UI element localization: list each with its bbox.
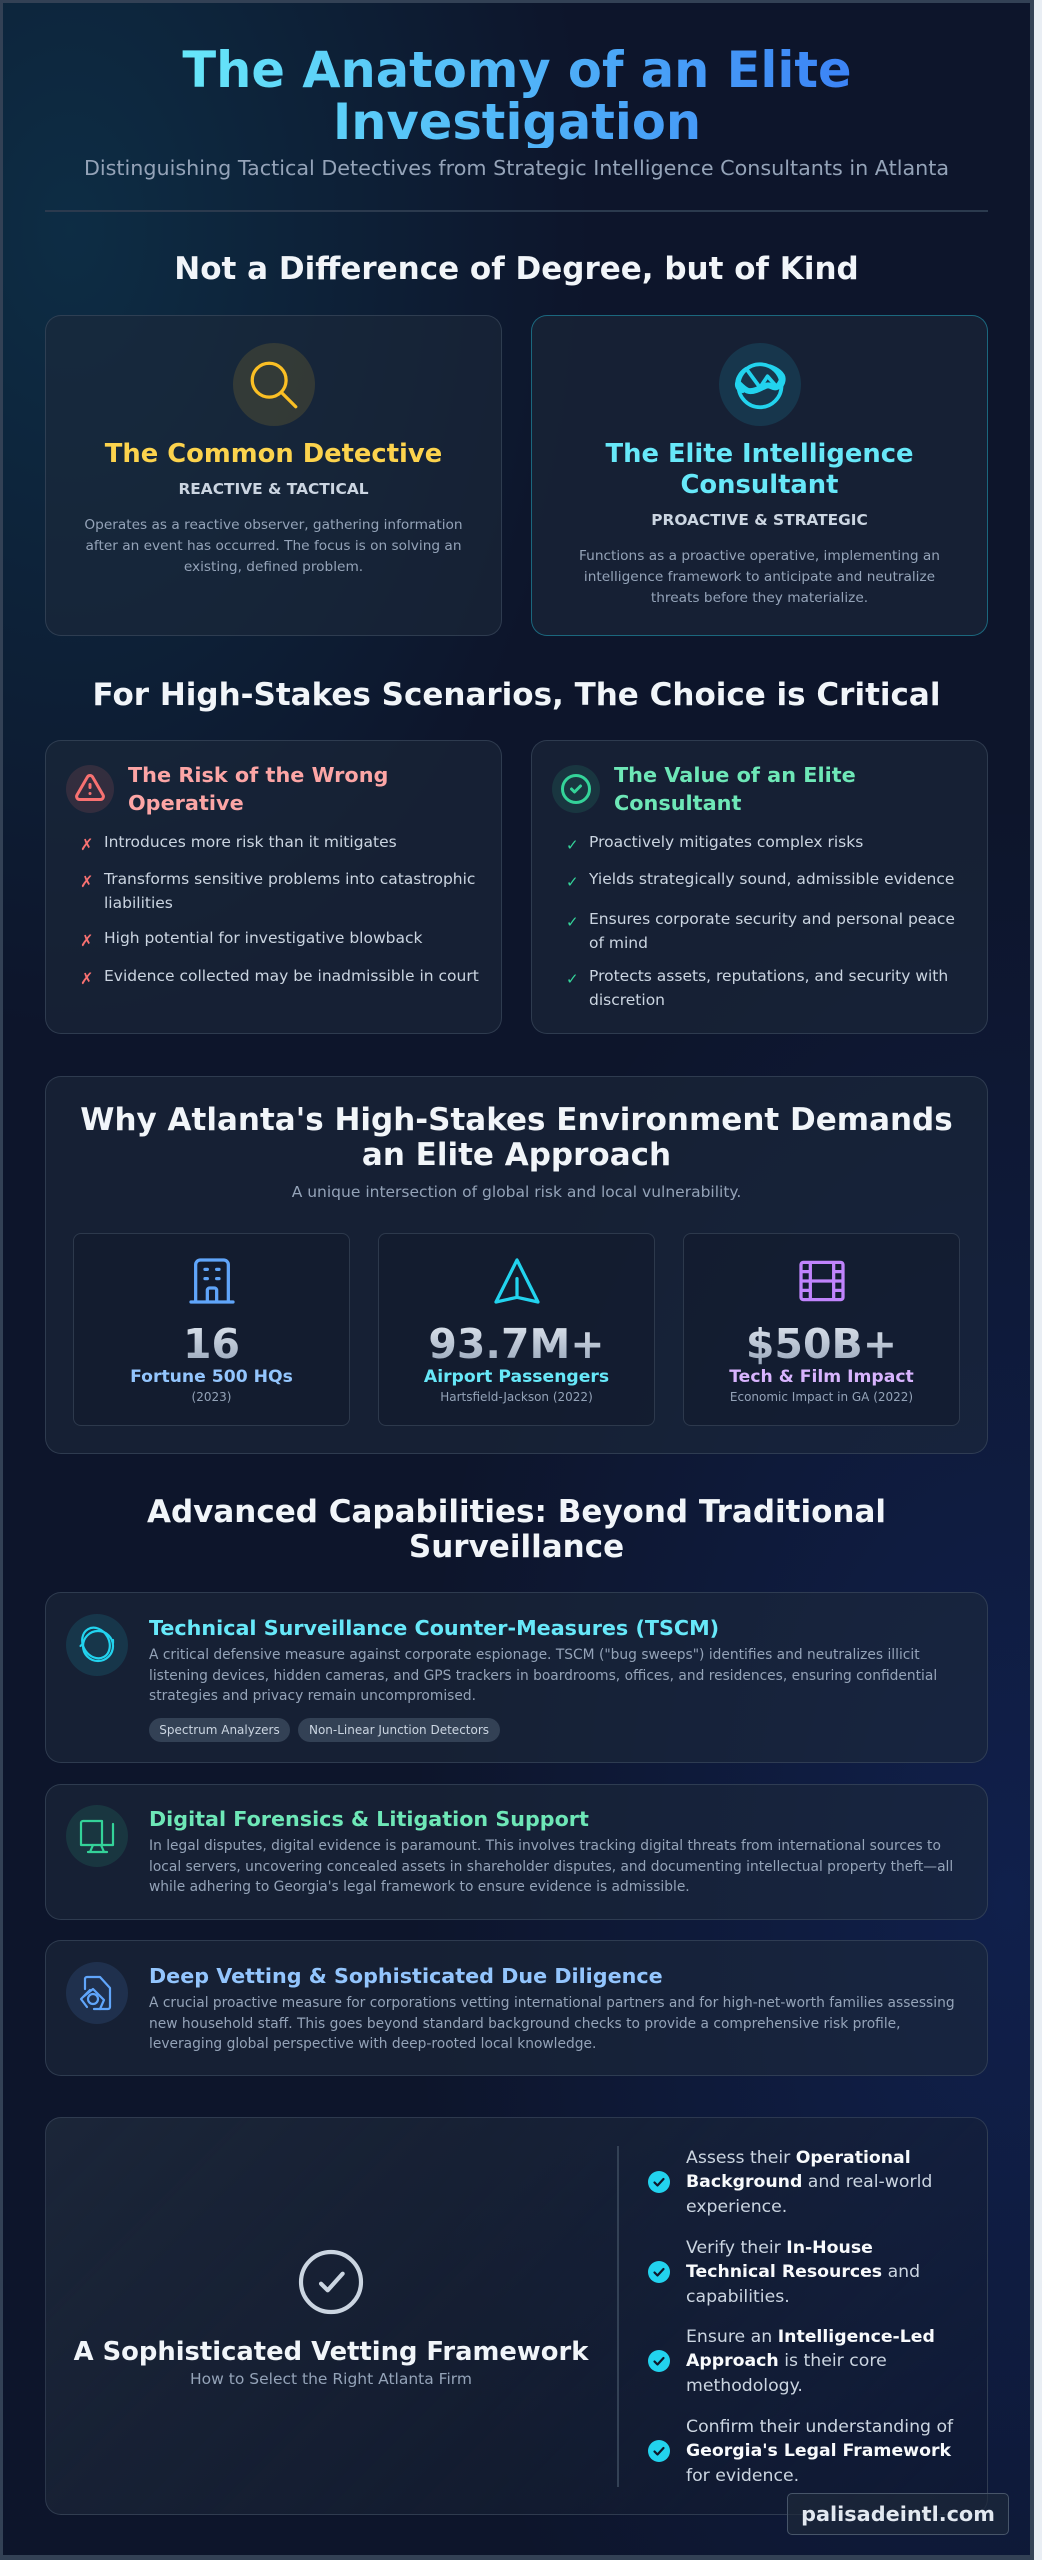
check: technical resources bbox=[648, 2261, 670, 2283]
risk title: The Risk of the Wrong bbox=[128, 763, 388, 787]
icon: office building bbox=[189, 1258, 235, 1304]
heading: difference of kind: Not a Difference of Degree, but of Kind bbox=[174, 251, 859, 287]
value list bbox=[566, 833, 955, 1009]
value title bbox=[614, 763, 856, 815]
note: 2023: (2023) bbox=[192, 1390, 231, 1404]
forensics title: Digital Forensics & Litigation Support bbox=[149, 1807, 589, 1831]
panel: deep vetting bbox=[45, 1940, 988, 2076]
Atlanta subtitle: A unique intersection of global risk and local vulnerability. bbox=[292, 1183, 741, 1201]
panel: TSCM bbox=[45, 1592, 988, 1763]
label: Airport Passengers: Airport Passengers bbox=[424, 1367, 609, 1387]
risk title: Operative bbox=[128, 791, 244, 815]
detective description: Operates as a reactive observer, gathering information bbox=[84, 517, 463, 533]
subtitle: Distinguishing Tactical Detectives from Strategic Intelligence Consultants in Atlanta bbox=[84, 156, 949, 180]
risk item 1: ✗ bbox=[80, 835, 93, 854]
icon: intelligence brain bbox=[719, 343, 801, 426]
framework title: A Sophisticated Vetting Framework bbox=[74, 2337, 588, 2367]
risk title bbox=[128, 763, 388, 815]
TSCM description bbox=[149, 1647, 937, 1704]
TSCM description: A critical defensive measure against corporate espionage. TSCM ("bug sweeps") identifies and neutralizes illicit bbox=[149, 1647, 920, 1663]
value title: Consultant bbox=[614, 791, 741, 815]
item: legal framework: Confirm their understanding of bbox=[686, 2417, 953, 2437]
check: intelligence-led bbox=[648, 2350, 670, 2372]
item: intelligence-led bbox=[686, 2327, 935, 2396]
risk item 2: Transforms sensitive problems into catastrophic bbox=[104, 870, 475, 888]
panel: risk of the wrong operative bbox=[45, 740, 502, 1034]
title: The Anatomy of an Elite bbox=[182, 41, 852, 99]
value: 93.7M+: 93.7M+ bbox=[428, 1320, 605, 1368]
icon: film strip bbox=[799, 1260, 845, 1302]
stat: airport passengers bbox=[378, 1233, 655, 1426]
value title: The Value of an Elite bbox=[614, 763, 856, 787]
title: Investigation bbox=[333, 93, 701, 151]
item: technical resources bbox=[686, 2238, 920, 2307]
note: Hartsfield-Jackson: Hartsfield-Jackson (2022) bbox=[440, 1390, 593, 1404]
consultant subtitle: PROACTIVE & STRATEGIC bbox=[651, 511, 868, 529]
detective description: existing, defined problem. bbox=[184, 559, 363, 575]
icon: TSCM orbit bbox=[66, 1614, 128, 1676]
item: operational background: Assess their Operational bbox=[686, 2148, 911, 2168]
detective title: The Common Detective bbox=[105, 439, 442, 469]
risk item 2: ✗ bbox=[80, 872, 93, 891]
stat: tech and film bbox=[683, 1233, 960, 1426]
TSCM description: listening devices, hidden cameras, and GPS trackers in boardrooms, offices, and residences, ensuring confidential bbox=[149, 1668, 937, 1684]
Atlanta heading: Why Atlanta's High-Stakes Environment Demands bbox=[80, 1102, 953, 1138]
vetting description: leveraging global perspective with deep-rooted local knowledge. bbox=[149, 2036, 596, 2052]
consultant description: intelligence framework to anticipate and neutralize bbox=[584, 569, 935, 585]
Atlanta heading bbox=[80, 1102, 953, 1173]
icon: large check circle bbox=[298, 2250, 364, 2314]
value item 4: Protects assets, reputations, and security with bbox=[589, 967, 948, 985]
item: technical resources: Technical Resources and bbox=[686, 2262, 920, 2282]
stat: Fortune 500 bbox=[73, 1233, 350, 1426]
TSCM description: strategies and privacy remain uncompromised. bbox=[149, 1688, 476, 1704]
tag: junction detectors: Non-Linear Junction Detectors bbox=[309, 1723, 489, 1737]
label: Fortune 500 HQs: Fortune 500 HQs bbox=[130, 1367, 293, 1387]
value item 1: Proactively mitigates complex risks bbox=[589, 833, 863, 851]
item: operational background bbox=[686, 2148, 932, 2217]
value item 4: discretion bbox=[589, 991, 665, 1009]
item: legal framework: for evidence. bbox=[686, 2466, 799, 2486]
risk item 4: Evidence collected may be inadmissible in court bbox=[104, 967, 479, 985]
panel: digital forensics bbox=[45, 1784, 988, 1920]
value item 2: ✓ bbox=[566, 873, 579, 891]
framework subtitle: How to Select the Right Atlanta Firm bbox=[190, 2370, 472, 2388]
consultant title: Consultant bbox=[680, 470, 839, 500]
item: intelligence-led: methodology. bbox=[686, 2376, 803, 2396]
icon: monitor bbox=[66, 1805, 128, 1867]
detective description: after an event has occurred. The focus is on solving an bbox=[85, 538, 462, 554]
value: 16: 16 bbox=[183, 1320, 240, 1368]
item: intelligence-led: Ensure an Intelligence-Led bbox=[686, 2327, 935, 2347]
heading: advanced capabilities bbox=[147, 1494, 886, 1564]
panel: elite consultant bbox=[531, 315, 988, 636]
vetting description: A crucial proactive measure for corporations vetting international partners and for high-net-worth families assessing bbox=[149, 1995, 955, 2011]
badge: website: palisadeintl.com bbox=[801, 2502, 995, 2526]
value item 3: ✓ bbox=[566, 913, 579, 931]
icon: magnifying glass bbox=[233, 343, 315, 426]
consultant title: The Elite Intelligence bbox=[606, 439, 914, 469]
value item 4 bbox=[566, 967, 948, 1009]
value: $50B+: $50B+ bbox=[746, 1320, 897, 1368]
consultant description: Functions as a proactive operative, implementing an bbox=[579, 548, 940, 564]
vetting description: new household staff. This goes beyond standard background checks to provide a comprehensive risk profile, bbox=[149, 2016, 901, 2032]
heading: advanced capabilities: Surveillance bbox=[409, 1528, 624, 1564]
badge: website bbox=[787, 2493, 1009, 2535]
risk item 4: ✗ bbox=[80, 969, 93, 988]
item: legal framework: Georgia's Legal Framework bbox=[686, 2441, 951, 2461]
risk item 3: High potential for investigative blowback bbox=[104, 929, 422, 947]
risk item 1: Introduces more risk than it mitigates bbox=[104, 833, 397, 851]
detective description bbox=[84, 517, 463, 575]
panel: value of an elite consultant bbox=[531, 740, 988, 1034]
icon: check circle bbox=[552, 765, 600, 813]
check: legal framework bbox=[648, 2440, 670, 2462]
title bbox=[176, 44, 858, 148]
label: Tech & Film Impact: Tech & Film Impact bbox=[729, 1367, 914, 1387]
heading: high-stakes scenarios: For High-Stakes Scenarios, The Choice is Critical bbox=[93, 677, 940, 713]
risk item 3: ✗ bbox=[80, 931, 93, 950]
risk list bbox=[80, 833, 479, 988]
consultant description bbox=[579, 548, 940, 606]
risk item 2 bbox=[80, 870, 475, 912]
value item 1: ✓ bbox=[566, 836, 579, 854]
tag: spectrum analyzers: Spectrum Analyzers bbox=[159, 1723, 280, 1737]
consultant description: threats before they materialize. bbox=[651, 590, 868, 606]
TSCM title: Technical Surveillance Counter-Measures (TSCM) bbox=[149, 1616, 719, 1640]
forensics description: while adhering to Georgia's legal framework to ensure evidence is admissible. bbox=[149, 1879, 690, 1895]
icon: paper airplane bbox=[494, 1258, 540, 1304]
note: economic impact: Economic Impact in GA (2022) bbox=[730, 1390, 913, 1404]
panel: vetting framework bbox=[45, 2117, 988, 2515]
vetting description bbox=[149, 1995, 955, 2052]
heading: advanced capabilities: Advanced Capabilities: Beyond Traditional bbox=[147, 1494, 886, 1530]
tag: junction detectors bbox=[298, 1718, 500, 1742]
icon: document with shield bbox=[66, 1962, 128, 2024]
value item 3: Ensures corporate security and personal peace bbox=[589, 910, 955, 928]
consultant title bbox=[606, 439, 914, 500]
item: legal framework bbox=[686, 2417, 954, 2486]
forensics description: local servers, uncovering concealed assets in shareholder disputes, and documenting intellectual property theft—all bbox=[149, 1859, 953, 1875]
item: technical resources: capabilities. bbox=[686, 2287, 790, 2307]
Atlanta heading: an Elite Approach bbox=[362, 1137, 671, 1173]
panel: why Atlanta bbox=[45, 1076, 988, 1454]
item: technical resources: Verify their In-House bbox=[686, 2238, 873, 2258]
forensics description: In legal disputes, digital evidence is paramount. This involves tracking digital threats from international sources to bbox=[149, 1838, 941, 1854]
check: operational background bbox=[648, 2171, 670, 2193]
value item 3: of mind bbox=[589, 934, 648, 952]
item: operational background: Background and real-world bbox=[686, 2172, 932, 2192]
value item 3 bbox=[566, 910, 955, 952]
value item 2: Yields strategically sound, admissible evidence bbox=[589, 870, 954, 888]
item: intelligence-led: Approach is their core bbox=[686, 2351, 887, 2371]
detective subtitle: REACTIVE & TACTICAL bbox=[178, 480, 369, 498]
panel: common detective bbox=[45, 315, 502, 636]
item: operational background: experience. bbox=[686, 2197, 787, 2217]
value item 4: ✓ bbox=[566, 970, 579, 988]
risk item 2: liabilities bbox=[104, 894, 173, 912]
forensics description bbox=[149, 1838, 953, 1895]
tag: spectrum analyzers bbox=[149, 1718, 290, 1742]
vetting title: Deep Vetting & Sophisticated Due Diligence bbox=[149, 1964, 663, 1988]
icon: warning triangle bbox=[66, 765, 114, 813]
